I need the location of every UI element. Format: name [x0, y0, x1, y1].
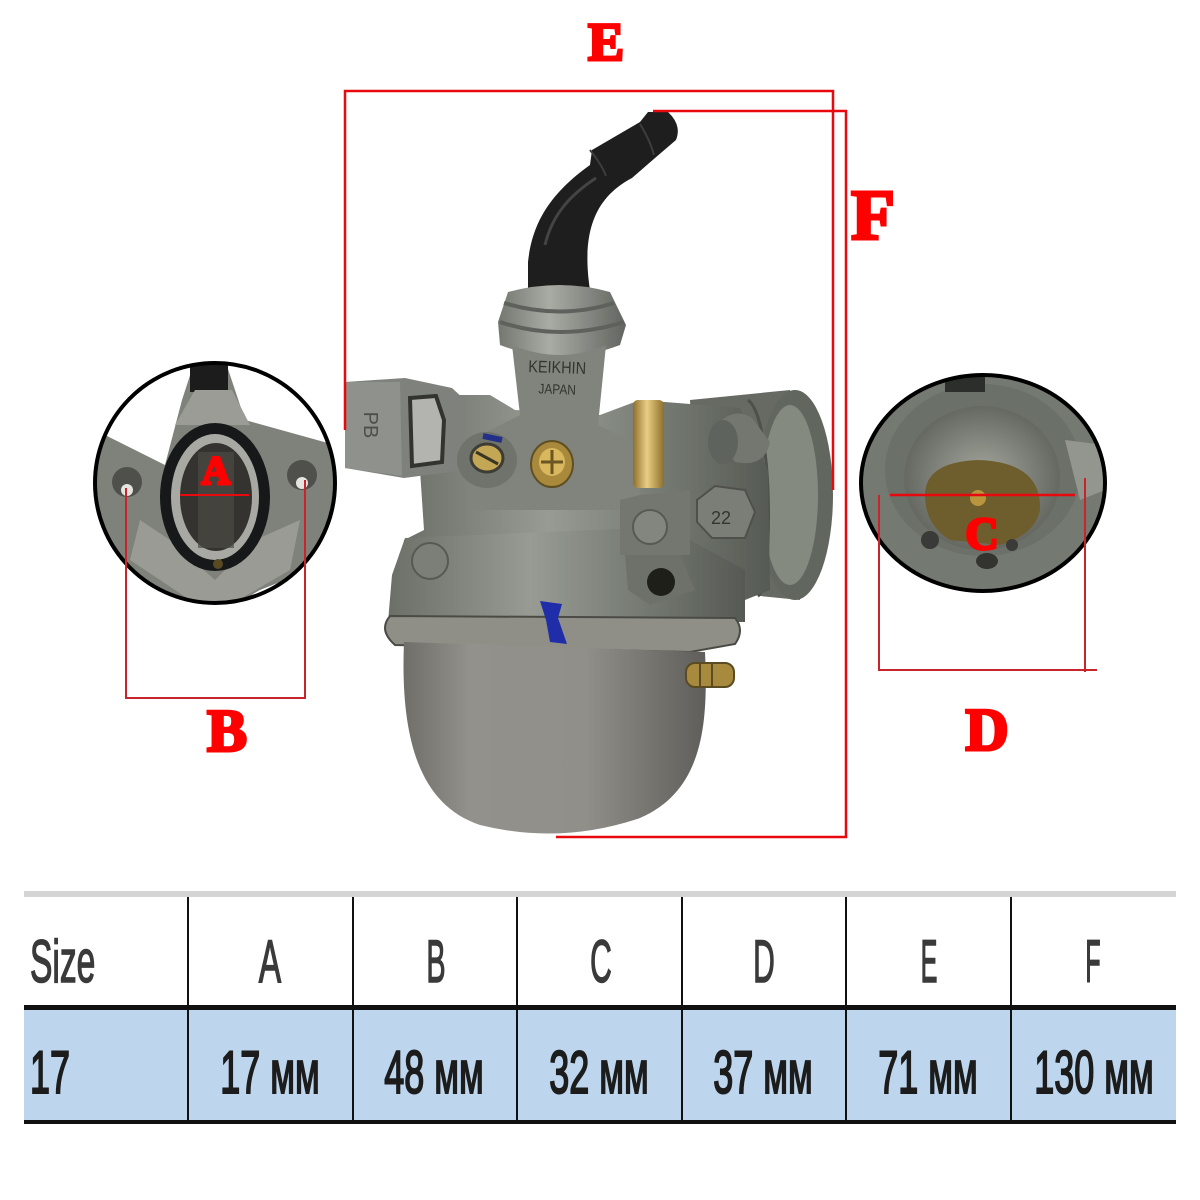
brass mixture screw — [531, 441, 573, 487]
header labels: Size — [30, 929, 95, 996]
choke lever block — [345, 378, 465, 478]
value labels: 17 мм — [220, 1040, 320, 1106]
letter F: F — [851, 175, 895, 255]
letter A: A — [202, 448, 231, 493]
choke lever block: PB — [359, 412, 381, 438]
blue paint mark — [540, 601, 567, 644]
fuel hose — [528, 112, 678, 290]
throttle tower with logo: KEIKHIN — [528, 358, 586, 378]
value labels: 32 мм — [549, 1040, 649, 1106]
idle adjuster knob — [708, 414, 770, 464]
throttle top nut — [498, 285, 626, 356]
float bowl — [404, 642, 706, 834]
dimension D bracket — [879, 478, 1097, 672]
dimension C line — [890, 494, 1075, 496]
value labels: 71 мм — [878, 1040, 978, 1106]
header labels: B — [426, 927, 446, 995]
letter E: E — [588, 12, 624, 72]
brass vent nipple — [633, 400, 664, 488]
dimension B bracket — [126, 480, 305, 698]
throttle tower with logo — [470, 345, 640, 510]
main body — [400, 395, 770, 610]
letter D: D — [965, 697, 1009, 763]
drain screw — [686, 663, 734, 687]
air intake tube — [690, 390, 833, 600]
header labels: E — [921, 927, 937, 995]
hex plug marked 22 — [697, 486, 755, 538]
dimension lines — [126, 91, 1097, 837]
right inset: bore view — [860, 370, 1105, 600]
dimension E bracket — [345, 91, 833, 490]
dimension A line — [180, 494, 249, 496]
header row background — [24, 891, 1176, 1007]
idle screw boss with slotted screw — [457, 432, 517, 488]
header labels — [30, 927, 1101, 996]
header labels: D — [753, 929, 775, 996]
letter B: B — [207, 698, 247, 764]
value row background — [24, 1009, 1176, 1121]
header labels: A — [259, 929, 282, 996]
table rules — [24, 897, 1176, 1124]
lower body casting — [388, 490, 745, 622]
value labels: 37 мм — [713, 1040, 813, 1106]
header labels: C — [590, 929, 612, 996]
throttle tower with logo: JAPAN — [538, 380, 576, 398]
value labels: 48 мм — [384, 1040, 484, 1106]
carburetor side-view photo illustration — [345, 112, 833, 834]
letter C: C — [965, 508, 999, 559]
value labels: 17 — [30, 1040, 70, 1106]
value labels — [30, 1040, 1154, 1106]
dimension F bracket — [556, 111, 846, 837]
size table — [24, 891, 1176, 1124]
hex plug marked 22: 22 — [711, 508, 731, 528]
gasket flange — [385, 616, 740, 652]
left inset: flange view — [95, 360, 335, 610]
value labels: 130 мм — [1034, 1040, 1154, 1106]
header labels: F — [1085, 927, 1101, 995]
